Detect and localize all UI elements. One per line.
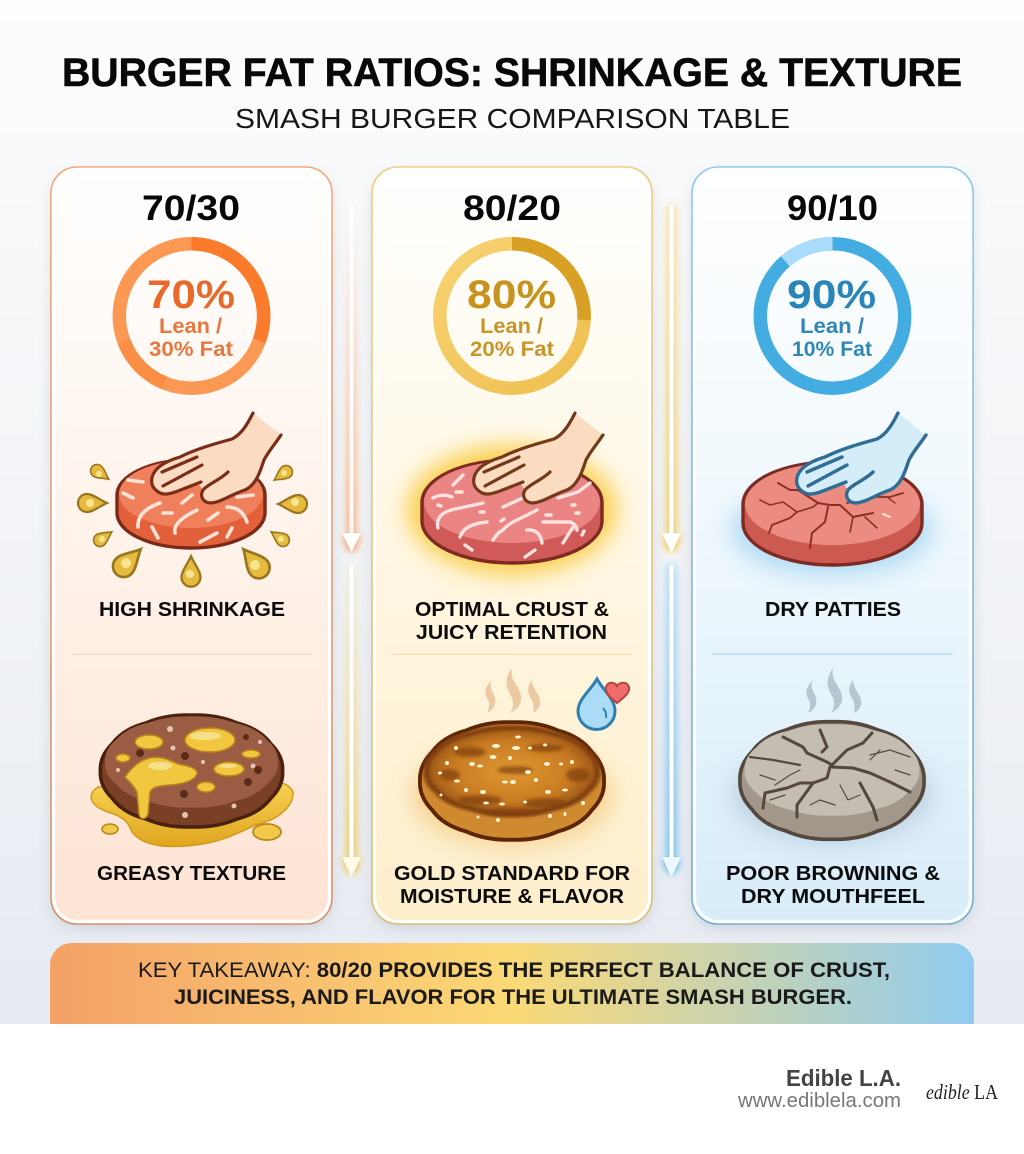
arrow: second gutter lower xyxy=(662,565,681,877)
footer: logo: edible LA xyxy=(926,1080,999,1104)
icon: seared golden patty xyxy=(412,722,612,845)
label: dry patties: DRY PATTIES xyxy=(765,599,901,621)
icon: hand pressing patty xyxy=(474,413,603,503)
label: poor browning: DRY MOUTHFEEL xyxy=(741,886,925,908)
takeaway text xyxy=(138,959,890,1009)
panel: 90/10 xyxy=(692,167,973,929)
ring: 90 percent lean xyxy=(760,244,905,388)
ring: 90 percent lean: 10% Fat xyxy=(792,338,872,361)
label: greasy texture: GREASY TEXTURE xyxy=(97,863,286,885)
footer: website: www.ediblela.com xyxy=(737,1090,901,1112)
heading: 80/20: 80/20 xyxy=(463,189,561,228)
label: high shrinkage: HIGH SHRINKAGE xyxy=(99,599,285,621)
ring: 70 percent lean xyxy=(119,244,264,388)
icon: fat droplets xyxy=(78,462,307,587)
label: poor browning xyxy=(726,863,940,908)
label: poor browning: POOR BROWNING & xyxy=(726,863,940,885)
footer white area xyxy=(0,1024,1024,1154)
icon: gloved hand pressing patty xyxy=(797,413,926,503)
arrow: first gutter upper xyxy=(342,205,361,552)
footer: publisher name: Edible L.A. xyxy=(786,1065,901,1091)
icon: raw patty with fat xyxy=(117,460,265,548)
heading: 90/10: 90/10 xyxy=(787,189,878,228)
icon: steam xyxy=(485,668,540,713)
ring: 70 percent lean: Lean / xyxy=(159,315,222,338)
icon: greasy patty xyxy=(91,715,293,847)
takeaway text: JUICINESS, AND FLAVOR FOR THE ULTIMATE SMASH BURGER. xyxy=(174,986,852,1009)
label: optimal crust and juicy retention xyxy=(415,599,609,644)
ring: 80 percent lean xyxy=(440,244,584,388)
title: BURGER FAT RATIOS: SHRINKAGE & TEXTURE xyxy=(62,51,962,95)
panel: 80/20 xyxy=(372,167,652,929)
label: optimal crust and juicy retention: OPTIMAL CRUST & xyxy=(415,599,609,621)
ring: 80 percent lean: Lean / xyxy=(480,315,543,338)
ring: 70 percent lean: 30% Fat xyxy=(149,338,233,361)
panel: 70/30 xyxy=(51,167,332,929)
heading: 70/30: 70/30 xyxy=(142,189,240,228)
subtitle: SMASH BURGER COMPARISON TABLE xyxy=(235,103,790,134)
takeaway text: KEY TAKEAWAY: 80/20 PROVIDES THE PERFECT BALANCE OF CRUST, xyxy=(138,959,890,982)
icon: water drop with heart xyxy=(578,679,629,730)
arrow: first gutter lower xyxy=(342,565,361,877)
arrow: second gutter upper xyxy=(662,205,681,553)
icon: grey cracked patty xyxy=(732,722,932,843)
label: optimal crust and juicy retention: JUICY RETENTION xyxy=(416,622,607,644)
icon: hand pressing patty xyxy=(152,413,281,503)
ring: 80 percent lean: 20% Fat xyxy=(470,338,554,361)
key takeaway band xyxy=(50,943,974,1024)
label: gold standard: GOLD STANDARD FOR xyxy=(394,863,631,885)
icon: raw patty with golden glow xyxy=(408,446,616,574)
ring: 80 percent lean: 80% xyxy=(467,273,556,317)
ring: 90 percent lean: 90% xyxy=(787,273,876,317)
icon: grey steam xyxy=(806,668,861,713)
icon: dry cracked raw patty xyxy=(732,462,932,574)
label: gold standard: MOISTURE & FLAVOR xyxy=(400,886,625,908)
ring: 90 percent lean: Lean / xyxy=(800,315,864,338)
label: gold standard xyxy=(394,863,631,908)
ring: 70 percent lean: 70% xyxy=(147,273,235,317)
